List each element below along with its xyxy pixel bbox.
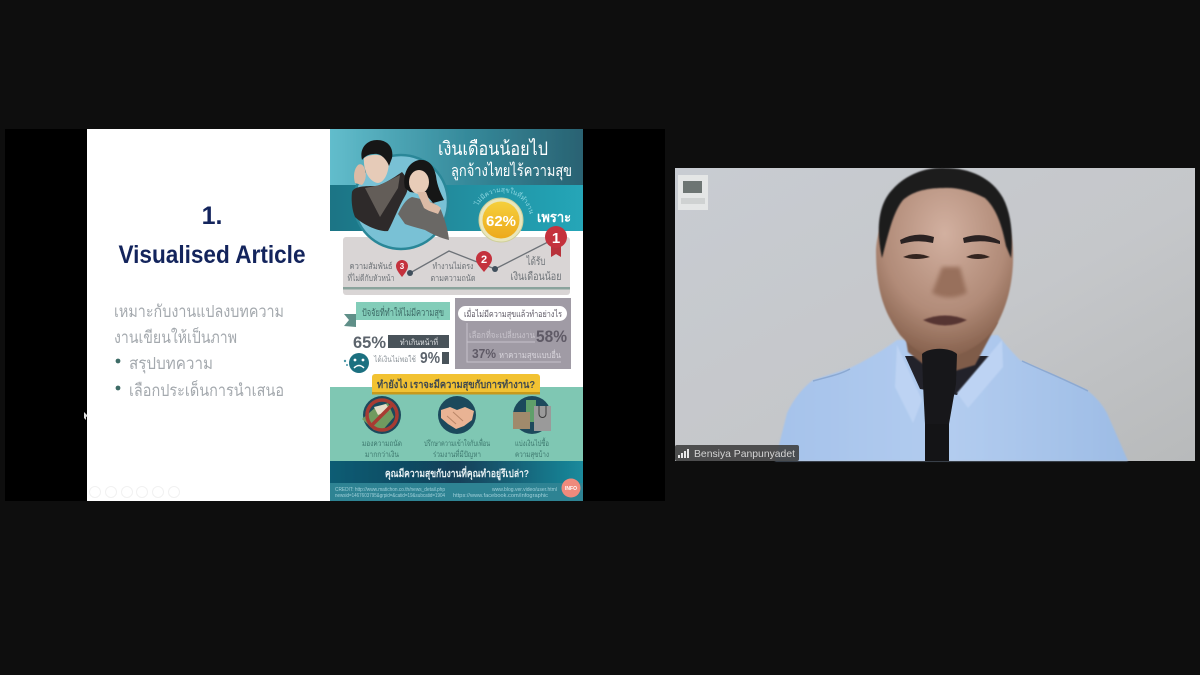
65 percent stat [353,333,449,352]
unhappy actions panel [455,298,571,369]
slide number heading: 1. [202,202,222,230]
shared screen panel [5,129,665,501]
reason 3: 3 [400,262,405,271]
reason 1: ได้รับ [526,255,546,268]
logo badge [562,478,580,498]
reason 2: ตามความถนัด [430,273,476,283]
embedded infographic [330,129,583,501]
9 percent stat: 9% [420,350,440,367]
solution 1: มองความถนัด [362,439,402,448]
slide body text [114,302,284,400]
header title: เงินเดือนน้อยไป [438,138,548,160]
reason 1: เงินเดือนน้อย [510,270,562,283]
label around 62 percent: ไม่มีความสุขในที่ทำงาน [473,188,533,214]
solutions question banner: ทำยังไง เราจะมีความสุขกับการทำงาน? [377,378,535,392]
reason 1: 1 [552,230,560,247]
face [876,180,1013,358]
video feed panel [675,168,1195,461]
unhappy actions panel: 58% [536,327,567,346]
credits strip: newsid=1467603795&grpid=&catid=19&subcatid=1904 [335,493,445,499]
woman [398,197,449,240]
65 percent stat: ทำเกินหน้าที่ [400,336,438,347]
microphone [922,349,957,461]
solution 3 [513,396,551,459]
solution 2: ปรึกษาความเข้าใจกับเพื่อน [424,437,490,448]
collar [895,340,1003,423]
hair [879,168,1012,258]
slide: white text area [87,129,330,501]
slide body text: เลือกประเด็นการนำเสนอ [129,379,284,400]
footer banner [330,461,583,483]
slide title: Visualised Article [118,241,306,269]
reason 2: ทำงานไม่ตรง [432,261,474,271]
slide body text: งานเขียนให้เป็นภาพ [114,326,237,347]
reason 2 [430,251,492,283]
shirt [775,335,1128,461]
65 percent stat: 65% [353,333,386,352]
trend line [410,242,548,273]
credits strip: CREDIT: http://www.matichon.co.th/news_detail.php [335,487,445,493]
reason 1 [510,226,567,283]
unhappy actions panel: 37% [472,346,496,361]
ranking panel: reasons [343,226,570,295]
illustration: stressed workers [352,140,449,249]
reason 3: ความสัมพันธ์ [350,261,392,271]
participant name tag [675,445,799,461]
reason 3: ที่ไม่ดีกับหัวหน้า [348,272,394,283]
unhappy actions panel: หาความสุขแบบอื่น [499,349,561,361]
factors ribbon: ปัจจัยที่ทำให้ไม่มีความสุข [362,305,444,319]
presenter [775,168,1128,461]
solution 1: มากกว่าเงิน [365,450,399,459]
wall thermostat [678,175,708,210]
reason 3 [348,260,408,283]
62 percent badge: 62% [486,213,516,230]
credits strip: www.blog.ver.video/user.html [492,487,557,493]
solutions question banner [372,374,540,394]
participant name tag: Bensiya Panpunyadet [694,448,795,460]
slide body text: สรุปบทความ [129,354,213,374]
mouth [923,316,967,326]
reason 2: 2 [481,254,487,266]
solution 2: ร่วมงานที่มีปัญหา [433,448,481,459]
infographic header: ลูกจ้างไทยไร้ความสุข [451,161,572,181]
teal solutions section [330,374,583,467]
man [352,172,408,231]
unhappy actions panel: เลือกที่จะเปลี่ยนงาน [469,329,535,340]
9 percent stat: ได้เงินไม่พอใช้ [373,355,416,364]
9 percent stat [373,350,449,367]
nose [932,267,967,298]
unhappy actions panel: เมื่อไม่มีความสุขแล้วทำอย่างไร [464,307,562,320]
62 percent badge [479,198,523,242]
footer banner: คุณมีความสุขกับงานที่คุณทำอยู่รึเปล่า? [385,465,529,481]
undershirt [905,356,990,395]
infographic header [330,129,583,231]
because label: เพราะ [537,209,571,225]
eyebrows and eyes [900,235,1000,259]
factors section [344,302,450,373]
solution 3: ความสุขบ้าง [515,450,549,459]
credits strip [330,483,583,501]
solution 1 [362,396,402,459]
solution 2 [424,396,490,459]
sad face icon [344,353,369,373]
mouse cursor [84,412,88,420]
neck [903,322,998,376]
slideshow controls [90,486,180,498]
solution 3: แบ่งเงินไปซื้อ [515,437,549,448]
slide body text: เหมาะกับงานแปลงบทความ [114,302,284,321]
logo badge: INFO [565,486,577,492]
credits strip: https://www.facebook.com/infographic [453,493,549,499]
